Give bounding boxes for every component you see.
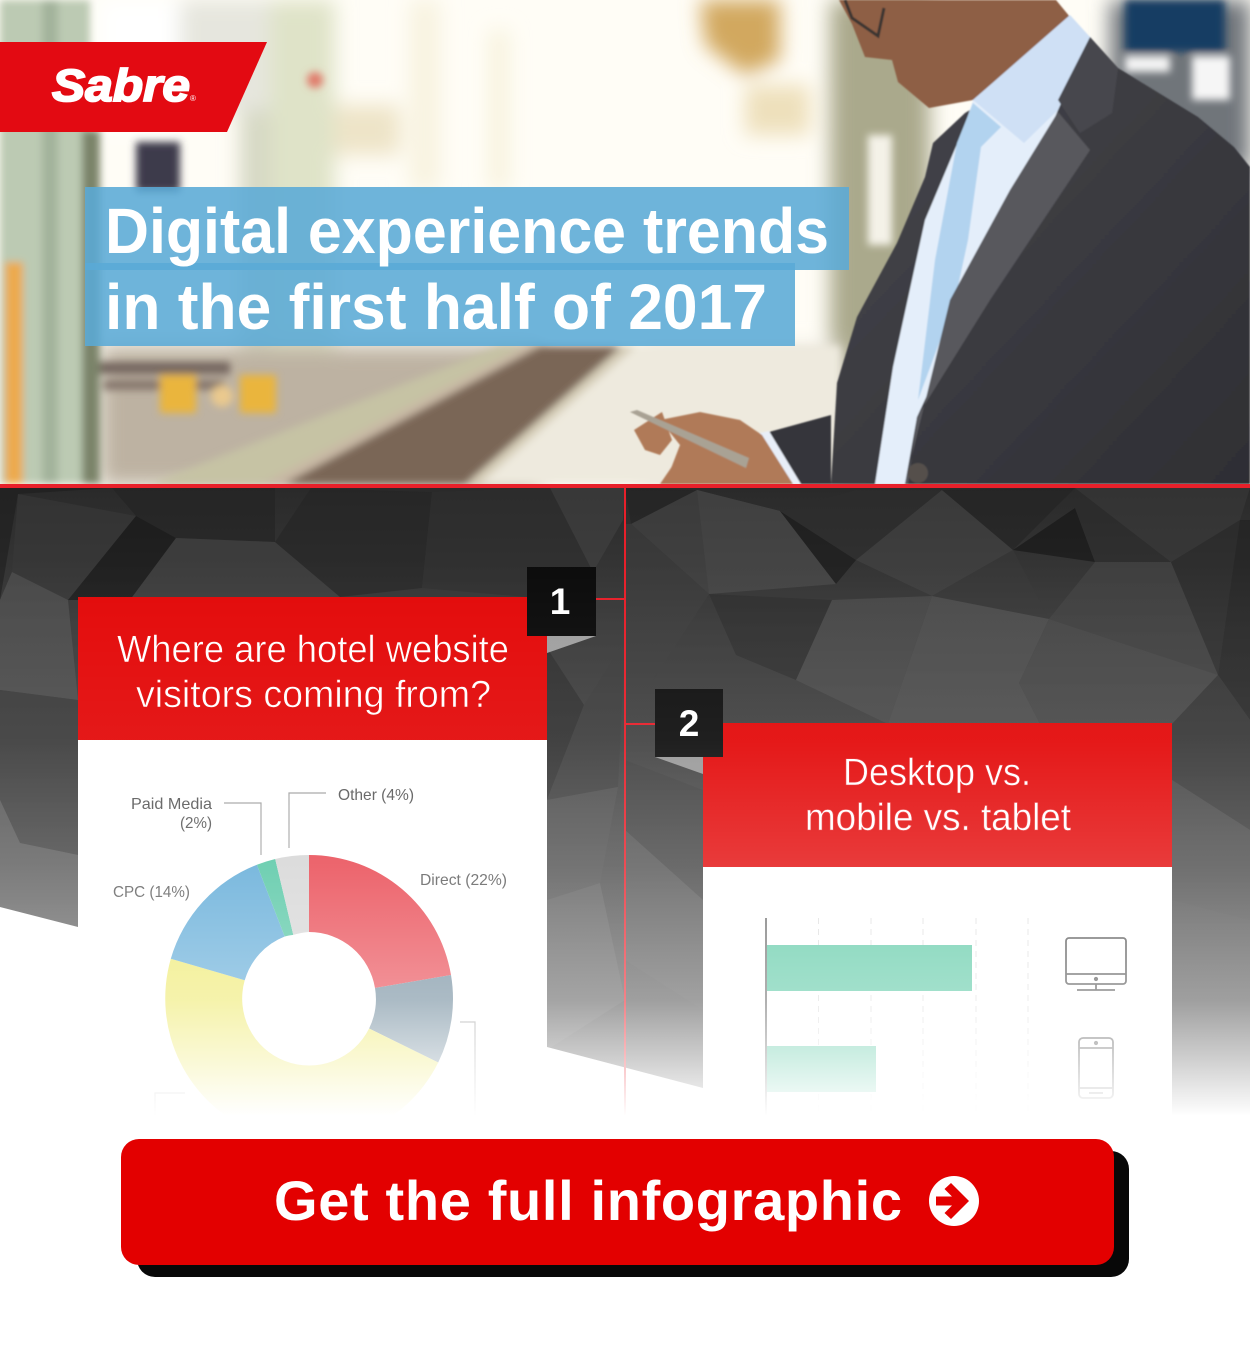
white fade overlay: [0, 560, 1250, 1116]
panel 1: traffic sources: [78, 567, 596, 1142]
call-to-action button: [121, 1139, 1129, 1277]
chart labels: CPC (14%): [113, 884, 190, 901]
panel 2 heading: [703, 723, 1172, 867]
badge 2: 2: [679, 703, 699, 744]
panel 2: device comparison: [655, 689, 1172, 1120]
hero photo: businessman on train platform: [0, 0, 1250, 486]
hand: [634, 412, 793, 484]
bar chart: [766, 918, 1028, 1115]
chart labels: [113, 787, 507, 901]
shirt: [874, 100, 1060, 484]
slice: CPC 14%: [171, 865, 285, 980]
slice: organic: [369, 975, 453, 1062]
slice: direct 22%: [309, 855, 451, 988]
chart labels: Other (4%): [338, 787, 414, 804]
connector lines: [0, 484, 1250, 1118]
bar: mobile: [767, 1046, 876, 1092]
bar: desktop: [767, 945, 972, 991]
icon: arrow in circle: [929, 1176, 979, 1226]
panel 1 heading: visitors coming from?: [136, 674, 491, 716]
Sabre logo banner: Sabre: [52, 60, 190, 111]
title: [85, 187, 849, 346]
slice: other 4%: [275, 855, 309, 935]
donut chart: [165, 855, 453, 1142]
chart labels: Direct (22%): [420, 872, 507, 889]
man figure: [630, 0, 1250, 484]
jacket button: [908, 463, 928, 483]
badge 1: 1: [550, 581, 570, 622]
panel 1 heading: Where are hotel website: [117, 629, 509, 671]
icon: mobile: [1079, 1038, 1113, 1098]
chart labels: (2%): [180, 815, 212, 832]
icon: desktop: [1066, 938, 1126, 990]
glasses: [845, 0, 884, 36]
Sabre logo banner: [0, 42, 267, 132]
panel 2 heading: mobile vs. tablet: [805, 797, 1071, 839]
collar: [973, 15, 1090, 143]
panel 1 body: [78, 740, 547, 1120]
Sabre logo banner: ®: [190, 94, 196, 103]
panel 1 heading: [78, 597, 547, 740]
title: in the first half of 2017: [105, 271, 767, 343]
slice: paid media 2%: [257, 859, 293, 936]
badge 1: [527, 567, 596, 636]
panel 2 heading: Desktop vs.: [843, 752, 1031, 794]
call-to-action button: Get the full infographic: [274, 1169, 902, 1232]
tie: [918, 103, 1001, 400]
phone: [630, 410, 749, 468]
lapel: [905, 112, 1090, 484]
title: Digital experience trends: [105, 195, 829, 267]
face and neck: [839, 0, 1070, 108]
leader lines: [155, 793, 475, 1115]
badge 2: [655, 689, 723, 757]
slice: referral: [165, 959, 438, 1142]
jacket: [831, 37, 1250, 484]
chart labels: Paid Media: [131, 796, 212, 813]
badge 1 fold: [547, 636, 596, 653]
sleeve and cuff: [769, 415, 831, 484]
badge 2 fold: [655, 757, 703, 774]
panel 2 body: [703, 867, 1172, 1120]
section background: low poly dark texture: [0, 488, 1250, 1120]
